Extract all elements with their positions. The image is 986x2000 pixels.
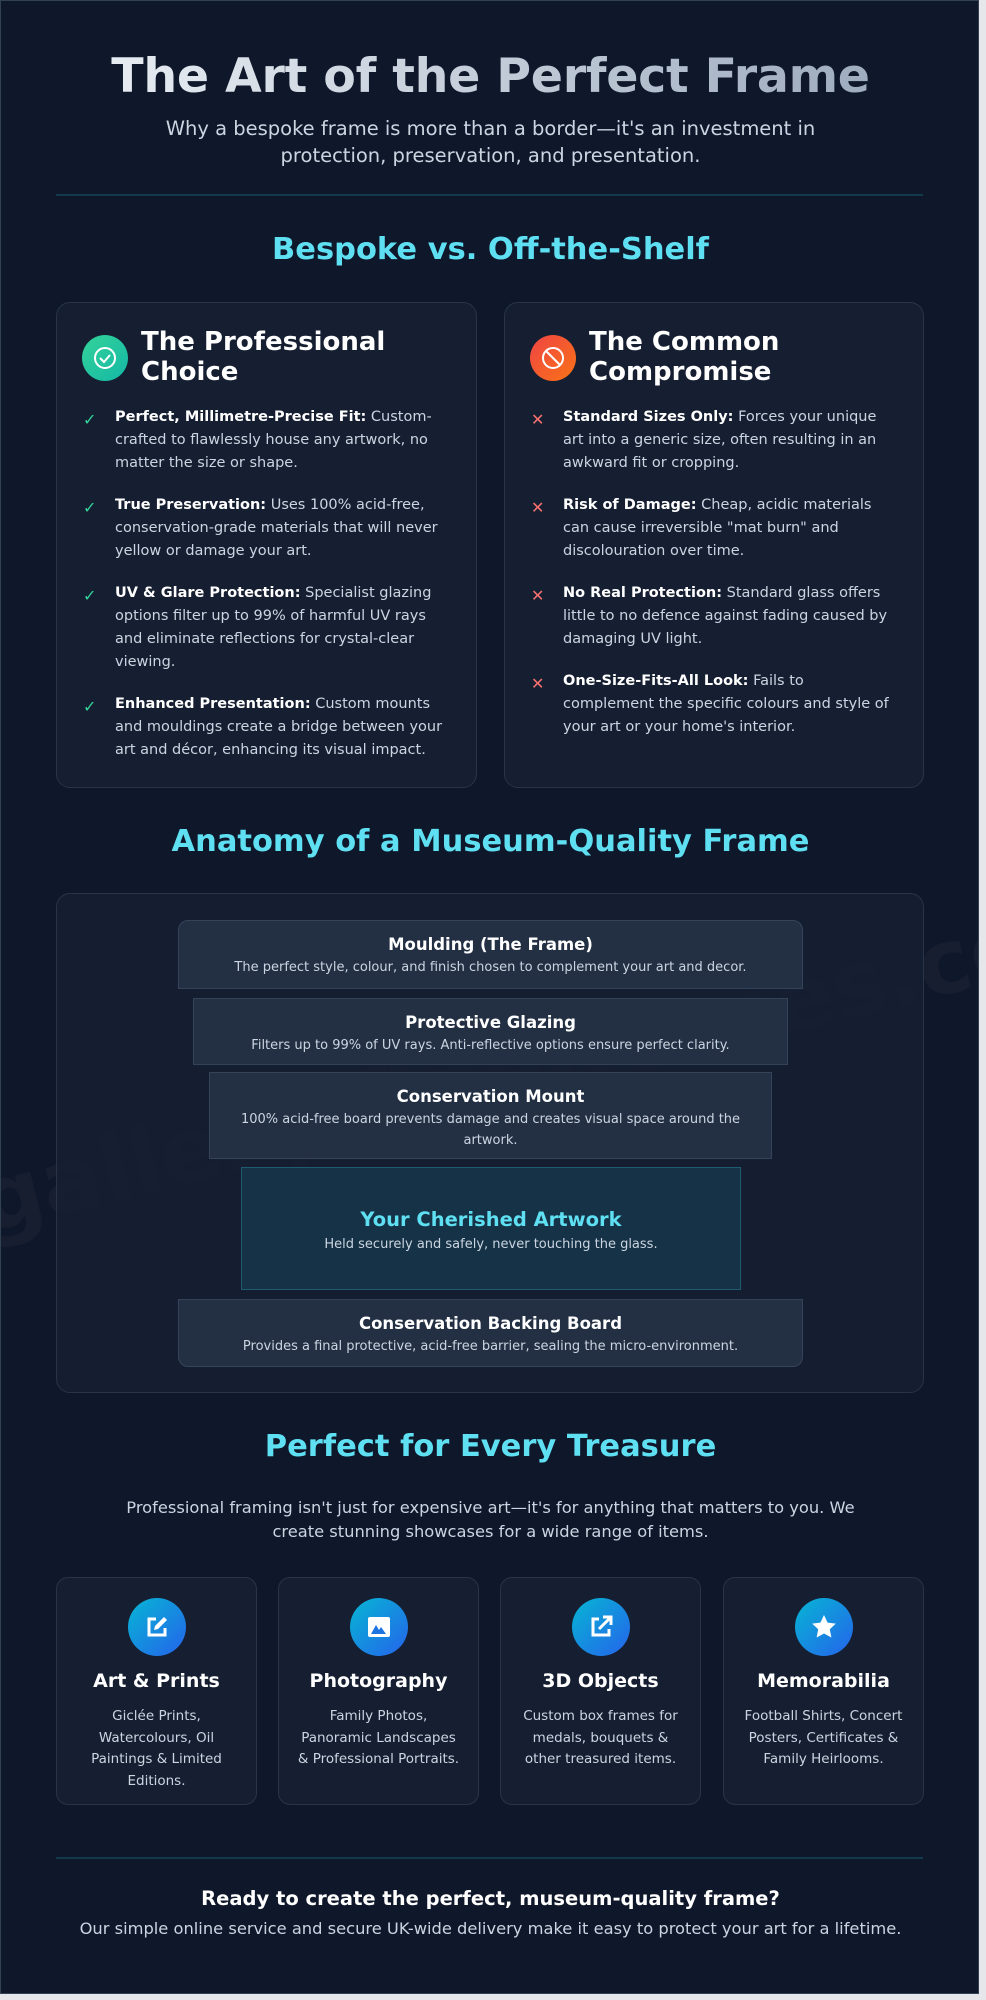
list item: and mouldings create a bridge between your [115, 719, 442, 735]
card title: Compromise [589, 357, 771, 387]
card: memorabilia: Football Shirts, Concert [745, 1708, 902, 1724]
layer: glazing: Protective Glazing [405, 1013, 576, 1032]
layer: moulding: The perfect style, colour, and finish chosen to complement your art and decor. [234, 960, 747, 975]
card: 3d objects: 3D Objects [542, 1670, 659, 1692]
card title: The Common [589, 327, 779, 357]
panel: common compromise: ✕ [531, 498, 544, 517]
icon: check circle [82, 335, 128, 381]
layer: artwork: Your Cherished Artwork [360, 1208, 622, 1231]
list item: can cause irreversible "mat burn" and [563, 520, 839, 536]
list item [83, 585, 431, 670]
card: 3d objects: other treasured items. [525, 1751, 676, 1767]
list item: discolouration over time. [563, 543, 744, 559]
icon: edit [128, 1598, 186, 1656]
subtitle [166, 117, 815, 167]
call to action: Ready to create the perfect, museum-quality frame? [201, 1887, 780, 1910]
panel: common compromise [504, 302, 924, 788]
list item [531, 497, 871, 559]
list item [531, 409, 876, 471]
list item: Standard Sizes Only: Forces your unique [563, 409, 876, 425]
card: art & prints: Watercolours, Oil [99, 1730, 214, 1746]
list item: UV & Glare Protection: Specialist glazing [115, 585, 431, 601]
list item [83, 696, 442, 758]
layer: mount: 100% acid-free board prevents damage and creates visual space around the artwork. [241, 1112, 740, 1148]
list item [83, 409, 432, 471]
call to action: Our simple online service and secure UK-wide delivery make it easy to protect your art for a lifetime. [80, 1919, 901, 1938]
layer: artwork [241, 1167, 741, 1290]
intro text [126, 1498, 855, 1541]
heading: perfect for every treasure: Perfect for Every Treasure [265, 1429, 716, 1464]
card title: Choice [141, 357, 238, 387]
list item: your art or your home's interior. [563, 719, 795, 735]
layer: mount [209, 1072, 772, 1159]
list item: Enhanced Presentation: Custom mounts [115, 696, 430, 712]
panel: professional choice [56, 302, 477, 788]
list item: No Real Protection: Standard glass offers [563, 585, 880, 601]
layer: backing board: Provides a final protective, acid-free barrier, sealing the micro-environment. [243, 1339, 738, 1354]
panel: anatomy diagram [56, 893, 924, 1393]
subtitle: Why a bespoke frame is more than a border—it's an investment in [166, 117, 815, 140]
intro text: create stunning showcases for a wide range of items. [272, 1522, 709, 1541]
card: photography: & Professional Portraits. [298, 1751, 459, 1767]
list item: art and décor, enhancing its visual impact. [115, 742, 426, 758]
card title: The Professional [141, 327, 385, 357]
icon: image [350, 1598, 408, 1656]
list item: viewing. [115, 654, 175, 670]
title: The Art of the Perfect Frame [111, 49, 870, 104]
card: 3d objects [500, 1577, 701, 1805]
card: photography [278, 1577, 479, 1805]
panel: common compromise: ✕ [531, 410, 544, 429]
list item: awkward fit or cropping. [563, 455, 739, 471]
heading: anatomy: Anatomy of a Museum-Quality Frame [172, 824, 810, 859]
layer: glazing [193, 998, 788, 1065]
list item: complement the specific colours and style of [563, 696, 889, 712]
layer: artwork: Held securely and safely, never touching the glass. [324, 1237, 658, 1252]
list item: little to no defence against fading caused by [563, 608, 887, 624]
layer: backing board [178, 1299, 803, 1367]
layer: moulding [178, 920, 803, 989]
card: memorabilia: Posters, Certificates & [749, 1730, 898, 1746]
panel: professional choice: ✓ [83, 410, 96, 429]
list item: matter the size or shape. [115, 455, 298, 471]
card: memorabilia: Family Heirlooms. [763, 1751, 884, 1767]
list item: Risk of Damage: Cheap, acidic materials [563, 497, 871, 513]
card: art & prints: Art & Prints [93, 1670, 220, 1692]
panel: professional choice: ✓ [83, 697, 96, 716]
layer: backing board: Conservation Backing Board [359, 1314, 622, 1333]
call to action [80, 1887, 901, 1938]
list item: yellow or damage your art. [115, 543, 312, 559]
panel: professional choice: ✓ [83, 498, 96, 517]
intro text: Professional framing isn't just for expensive art—it's for anything that matters to you. We [126, 1498, 855, 1517]
icon: prohibited [530, 335, 576, 381]
card: photography: Photography [310, 1670, 447, 1692]
card: photography: Panoramic Landscapes [301, 1730, 456, 1746]
card: photography: Family Photos, [330, 1708, 427, 1724]
list item: One-Size-Fits-All Look: Fails to [563, 673, 804, 689]
panel: common compromise: ✕ [531, 674, 544, 693]
card: art & prints: Editions. [127, 1773, 186, 1789]
list item: Perfect, Millimetre-Precise Fit: Custom- [115, 409, 432, 425]
card: memorabilia [723, 1577, 924, 1805]
card: 3d objects: medals, bouquets & [533, 1730, 668, 1746]
list item [531, 673, 889, 735]
card: art & prints: Giclée Prints, [112, 1708, 201, 1724]
card: memorabilia: Memorabilia [757, 1670, 890, 1692]
card title [141, 327, 385, 387]
layer: mount: Conservation Mount [397, 1087, 584, 1106]
card: art & prints: Paintings & Limited [91, 1751, 222, 1767]
panel: common compromise: ✕ [531, 586, 544, 605]
list item: conservation-grade materials that will never [115, 520, 438, 536]
list item: True Preservation: Uses 100% acid-free, [115, 497, 425, 513]
card: 3d objects: Custom box frames for [523, 1708, 678, 1724]
list item: art into a generic size, often resulting in an [563, 432, 876, 448]
layer: glazing: Filters up to 99% of UV rays. Anti-reflective options ensure perfect clarity. [251, 1038, 730, 1053]
card title [589, 327, 779, 387]
heading: bespoke vs off-the-shelf: Bespoke vs. Off-the-Shelf [272, 232, 709, 267]
list item: crafted to flawlessly house any artwork, no [115, 432, 428, 448]
list item: and eliminate reflections for crystal-clear [115, 631, 414, 647]
icon: star [795, 1598, 853, 1656]
list item: damaging UV light. [563, 631, 702, 647]
list item [531, 585, 887, 647]
icon: external box [572, 1598, 630, 1656]
layer: moulding: Moulding (The Frame) [388, 935, 593, 954]
card: art & prints [56, 1577, 257, 1805]
list item: options filter up to 99% of harmful UV rays [115, 608, 426, 624]
panel: professional choice: ✓ [83, 586, 96, 605]
list item [83, 497, 438, 559]
subtitle: protection, preservation, and presentation. [281, 144, 700, 167]
